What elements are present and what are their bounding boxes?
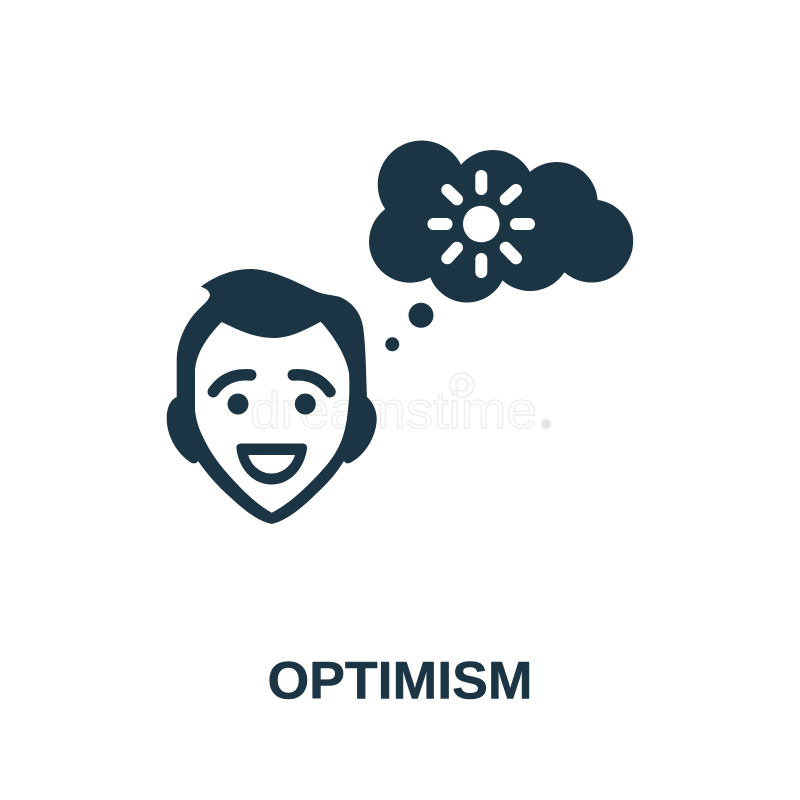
left eye (228, 394, 248, 414)
thought dots (385, 303, 434, 351)
left eyebrow (213, 375, 251, 392)
icon: sun (434, 176, 529, 272)
title: OPTIMISM (268, 652, 532, 710)
icon: smiling face (167, 269, 377, 524)
head and hair (167, 269, 377, 524)
thought cloud (369, 140, 633, 302)
right eye (295, 394, 316, 414)
right eyebrow (293, 375, 330, 392)
mouth (236, 444, 307, 484)
watermark: dreamstime (250, 382, 537, 440)
